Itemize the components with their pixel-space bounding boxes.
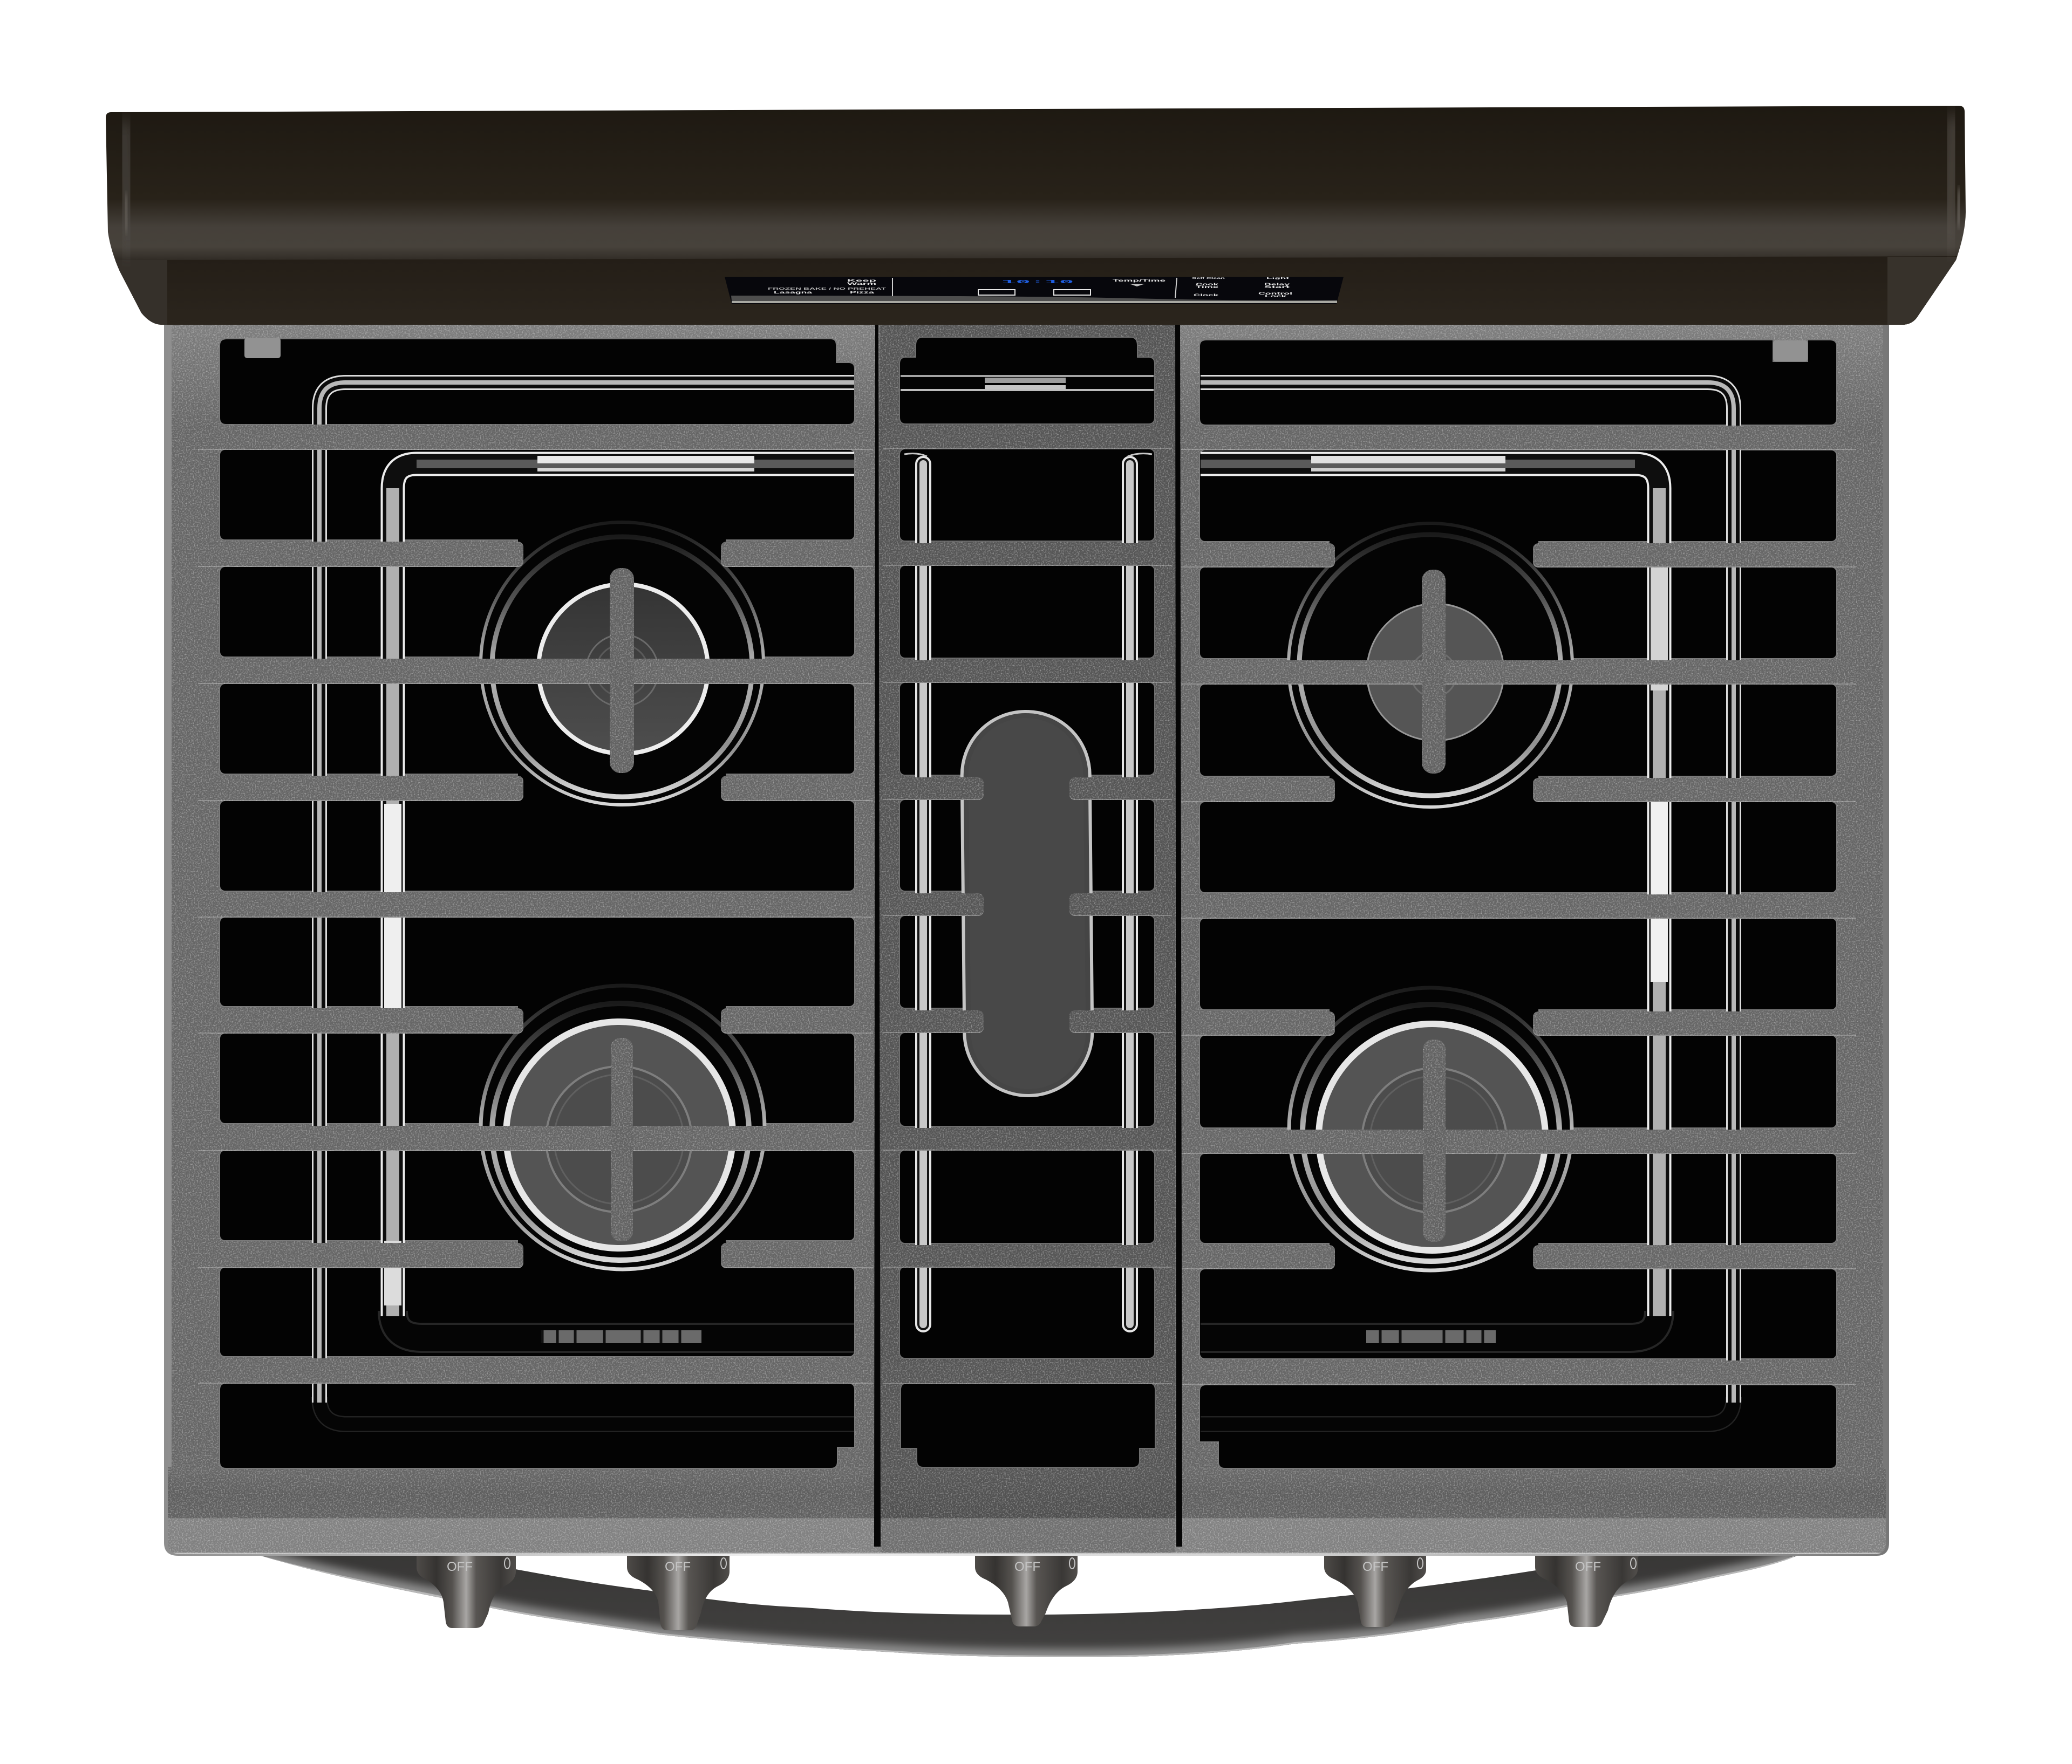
knob 2: [627, 1554, 730, 1630]
control panel display and arrows: [978, 279, 1166, 295]
grate support tabs: [244, 338, 1808, 361]
center rails: [901, 376, 1154, 1324]
burner: front left: [481, 986, 765, 1269]
control panel labels: right zone: Lock: [1265, 295, 1287, 298]
knob 2: OFF: [665, 1560, 691, 1574]
right rails: [1201, 382, 1734, 1424]
control panel labels: left zone: Lasagna: [774, 290, 812, 295]
control panel labels: right zone: Light: [1266, 277, 1290, 279]
grate separator gaps: [874, 324, 1182, 1547]
control panel labels: right zone: Delay: [1264, 283, 1290, 286]
oven door handle: [261, 1556, 1797, 1657]
control panel labels: right zone: Control: [1258, 292, 1292, 296]
knob 5: [1535, 1554, 1638, 1627]
control panel display and arrows: 10:10: [1001, 279, 1074, 285]
control panel labels: right zone: Clock: [1194, 293, 1219, 297]
left rails: [319, 382, 854, 1424]
burner: back left: [481, 522, 764, 805]
control panel labels: right zone: Time: [1196, 285, 1218, 289]
knob 3: [975, 1554, 1078, 1626]
control panel labels: right zone: Cook: [1196, 283, 1219, 286]
burner wells: left grate openings: [220, 339, 855, 1468]
knob 4: OFF: [1362, 1560, 1388, 1574]
knob 5: OFF: [1575, 1560, 1601, 1574]
burner: front right: [1289, 988, 1572, 1270]
burner wells: right grate openings: [1199, 340, 1837, 1468]
hood / backguard: [103, 106, 1969, 329]
burner: back right: [1289, 523, 1572, 807]
control panel labels: left zone: Pizza: [850, 290, 874, 295]
burner wells: center grate openings: [899, 337, 1155, 1467]
center griddle spreader: [962, 711, 1093, 1096]
gaps under the short bars: [518, 537, 1538, 1274]
grate bars: left: [198, 425, 873, 1384]
knob 1: OFF: [447, 1560, 473, 1574]
cooktop grate base: [168, 324, 1886, 1554]
control panel: [725, 277, 1344, 304]
knob 3: OFF: [1014, 1560, 1040, 1574]
control panel labels: right zone: Start: [1264, 285, 1290, 289]
control panel labels: left zone: Keep: [847, 279, 876, 283]
cooktop chrome edge: [164, 318, 1889, 1556]
control panel labels: left zone: FROZEN BAKE / NO PREHEAT: [768, 287, 887, 291]
grate bars: center: [883, 426, 1172, 1384]
control panel labels: left zone: [768, 279, 887, 295]
grate bars: right: [1181, 426, 1856, 1385]
control panel labels: right zone: Self Clean: [1192, 277, 1225, 279]
control panel display and arrows: Temp/Time: [1113, 279, 1166, 283]
knob 4: [1324, 1554, 1426, 1627]
control panel labels: right zone: [1192, 277, 1292, 298]
control panel labels: left zone: Warm: [847, 282, 876, 286]
knob 1: [417, 1554, 516, 1628]
